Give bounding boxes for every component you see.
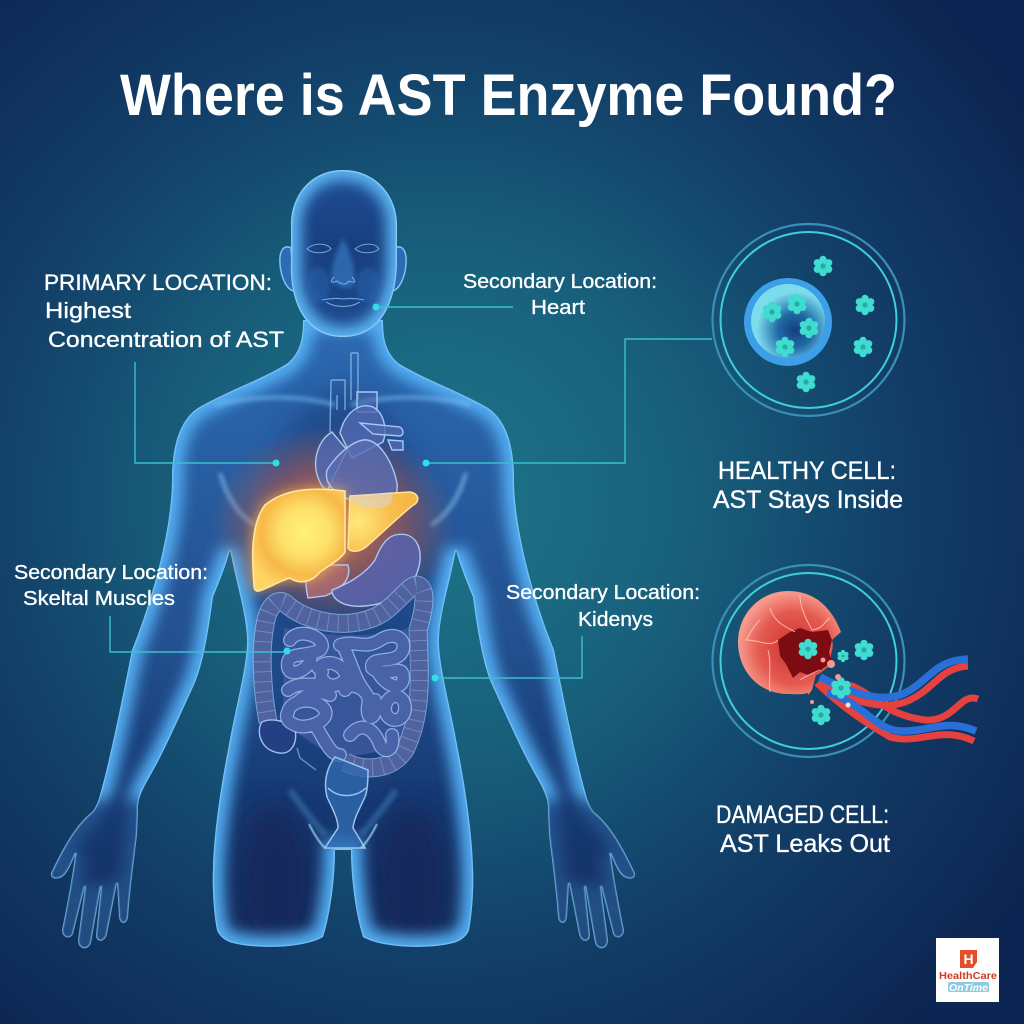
damaged cell caption: AST Leaks Out	[720, 830, 890, 858]
leader line: chest to healthy cell	[422, 339, 712, 466]
callout: skeletal muscles	[14, 561, 208, 610]
logo: HealthCare OnTime: H	[963, 951, 974, 967]
logo: HealthCare OnTime: OnTime	[949, 983, 988, 994]
ears	[280, 247, 406, 291]
cecum and appendix	[259, 720, 316, 770]
rectum	[325, 757, 368, 848]
callout: heart	[463, 270, 657, 319]
leader line: heart	[372, 304, 513, 310]
title: Where is AST Enzyme Found?	[120, 63, 897, 128]
pelvic crease highlights	[309, 824, 377, 848]
callout: kidneys	[506, 581, 700, 631]
callout: primary location text: Highest	[45, 298, 132, 323]
healthy cell caption: HEALTHY CELL:	[718, 457, 896, 485]
colon	[262, 585, 424, 768]
leader line: skeletal muscles	[110, 616, 290, 654]
healthy cell caption	[713, 457, 903, 514]
human body figure	[51, 170, 635, 955]
liver	[253, 489, 418, 592]
trachea and vessels	[330, 353, 358, 432]
icon: healthy cell	[712, 224, 904, 416]
blood vessels	[817, 659, 978, 741]
orange liver glow	[211, 425, 455, 625]
callout: primary location text	[44, 270, 284, 352]
head	[291, 170, 397, 337]
callout: heart: Heart	[531, 296, 585, 319]
leader line: primary location to liver	[135, 362, 280, 466]
logo: HealthCare OnTime	[936, 938, 999, 1002]
callout: primary location text: PRIMARY LOCATION:	[44, 270, 272, 295]
stomach	[306, 534, 420, 606]
leader line: kidneys	[432, 636, 582, 682]
logo: HealthCare OnTime: HealthCare	[939, 970, 997, 982]
damaged cell caption	[716, 801, 890, 858]
small intestine backing	[283, 628, 410, 758]
icon: damaged cell	[712, 565, 978, 757]
torso, arms and legs	[51, 320, 635, 955]
small intestine	[287, 634, 405, 755]
callout: kidneys: Secondary Location:	[506, 581, 700, 604]
callout: skeletal muscles: Skeltal Muscles	[23, 587, 175, 610]
heart	[316, 392, 403, 508]
healthy cell caption: AST Stays Inside	[713, 486, 903, 514]
callout: primary location text: Concentration of AST	[48, 327, 284, 352]
ruptured red cell	[738, 591, 841, 695]
callout: kidneys: Kidenys	[578, 608, 653, 631]
damaged cell caption: DAMAGED CELL:	[716, 801, 889, 829]
leaked AST enzymes	[799, 639, 817, 659]
callout: skeletal muscles: Secondary Location:	[14, 561, 208, 584]
callout: heart: Secondary Location:	[463, 270, 657, 293]
